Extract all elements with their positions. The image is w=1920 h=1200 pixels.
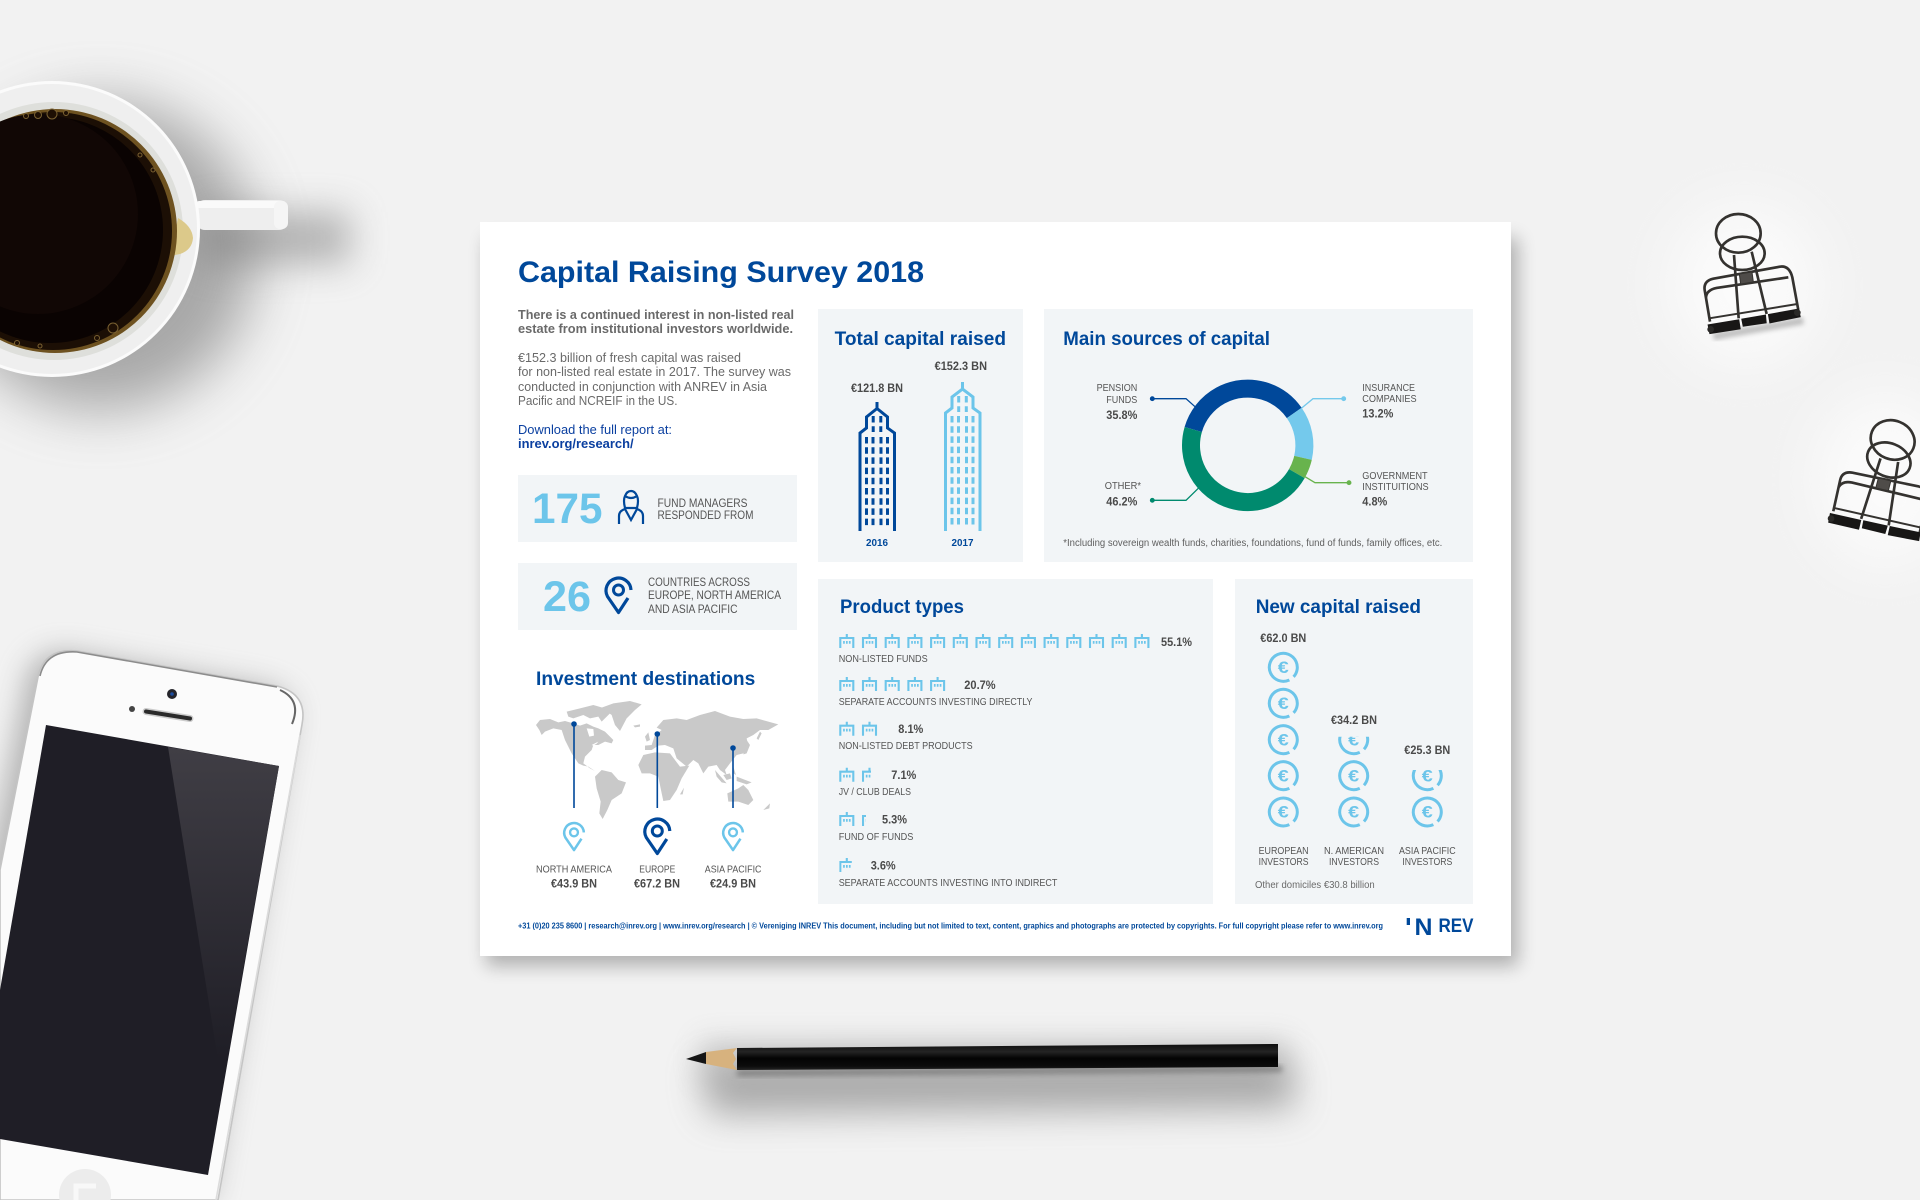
map pointers [572,722,735,808]
row: fund of funds [839,812,913,843]
panel: countries stat [518,563,797,630]
intro text block: There is a continued interest in non-listed real [518,308,794,322]
icon: 2016 building [860,402,894,531]
column: European investors: € [1278,766,1289,785]
icon: location pin [606,578,631,612]
panel: main sources of capital [1044,309,1473,562]
icon: 2017 building [946,382,980,531]
icon: Asia Pacific pin [723,823,743,850]
footer text: +31 (0)20 235 8600 | research@inrev.org | www.inrev.org/research | © Vereniging INREV This document, including but not limited to text, content, graphics and photographs are protected by copyrights. For full copyright please refer to www.inrev.org [518,922,1383,930]
heading: Total capital raised [835,329,1006,350]
donut labels: 13.2% [1362,409,1393,421]
logo: INREV [1407,914,1474,941]
column: Asia Pacific investors: ASIA PACIFIC [1399,845,1456,857]
row: fund of funds: 5.3% [882,815,907,827]
download link [518,423,672,451]
row: separate accounts investing directly [839,677,1032,708]
decoration: pencil [686,1040,1296,1114]
column: European investors [1259,633,1309,868]
column: European investors: € [1278,730,1289,749]
row: non-listed funds: NON-LISTED FUNDS [839,653,928,665]
column: Asia Pacific investors: € [1422,803,1433,822]
column: North American investors: N. AMERICAN [1324,845,1384,857]
panel: fund managers stat [518,475,797,542]
row: non-listed debt products [839,722,973,752]
decoration: coffee cup [0,81,350,410]
donut labels: 46.2% [1106,497,1137,509]
column: Asia Pacific investors [1399,745,1456,868]
row: JV / club deals [839,768,916,798]
donut labels: INSURANCE [1362,382,1415,394]
row: separate accounts investing into indirect [839,858,1058,889]
donut labels: GOVERNMENT [1362,470,1428,482]
column: North American investors: € [1348,766,1360,785]
region labels: €43.9 BN [551,879,597,891]
donut labels: INSTITUITIONS [1362,481,1429,493]
download link: Download the full report at: [518,423,672,437]
donut labels [1097,382,1429,509]
row: non-listed funds [839,634,1192,665]
intro text block: estate from institutional investors worldwide. [518,322,793,336]
intro text block: conducted in conjunction with ANREV in Asia [518,380,767,394]
column: Asia Pacific investors: €25.3 BN [1404,745,1450,757]
column: North American investors: €34.2 BN [1331,715,1377,727]
panel: fund managers stat: FUND MANAGERS [658,498,748,510]
donut labels: PENSION [1097,382,1137,394]
donut labels: 4.8% [1362,497,1387,509]
panel: total capital raised [818,309,1023,562]
column: North American investors: € [1348,803,1360,822]
donut labels: 35.8% [1106,410,1137,422]
heading: New capital raised [1256,597,1421,618]
decoration: smartphone [0,651,303,1200]
intro text block: Pacific and NCREIF in the US. [518,394,678,408]
download link: inrev.org/research/ [518,437,634,451]
row: non-listed debt products: NON-LISTED DEBT PRODUCTS [839,740,973,752]
column: European investors: € [1278,658,1289,677]
panel: total capital raised: €121.8 BN [851,383,903,395]
donut labels: COMPANIES [1362,393,1417,405]
footnote: *Including sovereign wealth funds, charities, foundations, fund of funds, family offices, etc. [1063,538,1442,549]
intro text block [518,308,794,408]
logo: INREV: N [1414,914,1432,941]
title: Capital Raising Survey 2018 [518,256,924,289]
region labels: ASIA PACIFIC [705,864,762,876]
panel: new capital raised [1235,579,1473,904]
column: North American investors [1324,715,1384,868]
row: JV / club deals: 7.1% [891,770,916,782]
icon: Europe pin [645,819,670,854]
column: North American investors: INVESTORS [1329,856,1379,868]
heading: Main sources of capital [1063,329,1270,350]
column: European investors: € [1278,803,1289,822]
panel: countries stat: COUNTRIES ACROSS [648,577,750,589]
column: European investors: € [1278,694,1289,713]
world map [536,701,778,819]
row: separate accounts investing into indirect: SEPARATE ACCOUNTS INVESTING INTO INDIRECT [839,877,1058,889]
row: separate accounts investing directly: SEPARATE ACCOUNTS INVESTING DIRECTLY [839,696,1032,708]
decoration: binder clips [1670,205,1920,565]
icon: fund manager [619,491,643,524]
leader lines [1150,397,1351,502]
column: Asia Pacific investors: INVESTORS [1402,856,1452,868]
intro text block: €152.3 billion of fresh capital was raised [518,351,741,365]
panel: total capital raised: 2017 [952,538,974,549]
intro text block: for non-listed real estate in 2017. The survey was [518,365,791,379]
row: non-listed debt products: 8.1% [898,724,923,736]
logo: INREV: REV [1438,915,1474,937]
panel: product types [818,579,1213,904]
panel: fund managers stat: 175 [532,485,602,533]
donut labels: FUNDS [1106,394,1137,406]
heading: Investment destinations [536,669,755,690]
region labels: EUROPE [639,864,675,876]
panel: total capital raised: 2016 [866,538,888,549]
panel: countries stat: 26 [543,573,591,621]
row: JV / club deals: JV / CLUB DEALS [839,786,911,798]
region labels: €67.2 BN [634,879,680,891]
panel: total capital raised: €152.3 BN [935,361,987,373]
panel: countries stat: AND ASIA PACIFIC [648,604,738,616]
heading: Product types [840,597,964,618]
region labels: NORTH AMERICA [536,864,612,876]
other domiciles note: Other domiciles €30.8 billion [1255,879,1375,891]
row: separate accounts investing into indirect: 3.6% [871,861,896,873]
infographic sheet [480,222,1511,956]
donut labels: OTHER* [1105,480,1141,492]
column: North American investors: € [1348,730,1360,749]
panel: countries stat: EUROPE, NORTH AMERICA [648,590,781,602]
icon: North America pin [564,823,584,850]
panel: investment destinations [536,669,778,891]
row: separate accounts investing directly: 20.7% [964,680,996,692]
column: European investors: EUROPEAN [1259,845,1309,857]
donut chart [1177,375,1318,516]
column: European investors: €62.0 BN [1260,633,1306,645]
column: Asia Pacific investors: € [1422,766,1433,785]
panel: fund managers stat: RESPONDED FROM [658,510,754,522]
region labels: €24.9 BN [710,879,756,891]
region labels [536,864,762,891]
row: fund of funds: FUND OF FUNDS [839,831,913,843]
column: European investors: INVESTORS [1259,856,1309,868]
paper shadow [486,238,1518,966]
row: non-listed funds: 55.1% [1161,637,1192,649]
